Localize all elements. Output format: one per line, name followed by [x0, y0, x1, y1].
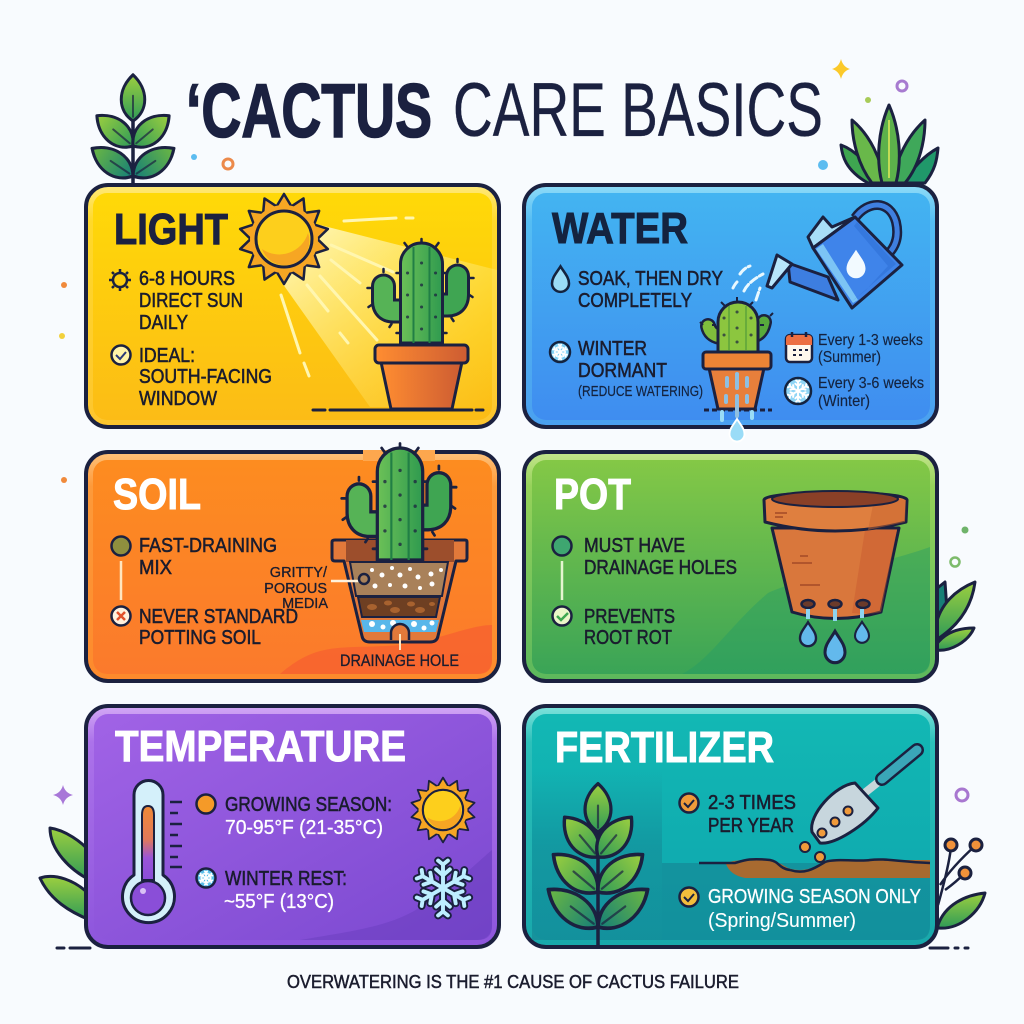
text: soak then dry: SOAK, THEN DRY	[578, 268, 723, 290]
panel background: fertilizer	[524, 706, 937, 947]
icon: calendar	[786, 332, 812, 362]
text: fast draining	[112, 535, 277, 579]
decoration: top left sprig	[85, 75, 181, 186]
title: CARE BASICS	[453, 68, 823, 153]
icon: sun	[238, 194, 330, 284]
heading: light: LIGHT	[114, 205, 228, 254]
text: prevents root rot: PREVENTS	[584, 606, 675, 628]
text: frequency	[680, 792, 796, 837]
text: ideal window	[112, 345, 272, 410]
callout: gritty porous media	[264, 565, 369, 612]
text: ideal window: SOUTH-FACING	[139, 366, 272, 388]
panel: light	[86, 185, 499, 427]
text: sun hours: 6-8 HOURS	[139, 268, 235, 290]
callout: gritty porous media: POROUS	[264, 581, 327, 597]
text: growing season only	[680, 886, 921, 932]
heading: pot: POT	[554, 470, 631, 519]
panel: fertilizer	[524, 706, 937, 948]
icon: sun	[410, 778, 476, 842]
icon: cactus in terracotta pot	[313, 239, 483, 410]
label: drainage hole: DRAINAGE HOLE	[340, 652, 459, 670]
icon: check	[680, 794, 698, 812]
icon: leafy plant	[540, 784, 656, 948]
heading: temperature: TEMPERATURE	[115, 722, 406, 771]
icon: blue badge	[196, 868, 216, 888]
text: must have drainage holes: MUST HAVE	[584, 535, 685, 557]
icon: trowel with fertilizer	[800, 750, 917, 862]
sun beam	[280, 225, 497, 407]
text: prevents root rot: ROOT ROT	[584, 627, 672, 649]
text: winter rest: WINTER REST:	[225, 868, 347, 890]
decoration: leaves right of pot panel	[935, 582, 975, 650]
decoration: berries and leaf right of fertilizer panel	[938, 839, 985, 928]
icon: cactus in soil cross section	[332, 444, 467, 650]
text: growing season: 70-95°F (21-35°C)	[225, 817, 383, 839]
text: winter dormant: (REDUCE WATERING)	[578, 384, 703, 400]
text: winter dormant: WINTER	[578, 338, 647, 360]
decoration: top right agave	[841, 105, 938, 183]
text: never standard: NEVER STANDARD	[139, 606, 298, 628]
decoration: dots and sparkles	[53, 59, 968, 948]
icon: soil badge	[112, 536, 130, 556]
text: winter schedule	[785, 375, 924, 410]
icon: snow badge	[550, 342, 570, 362]
sun rays	[281, 218, 413, 376]
text: soak then dry: COMPLETELY	[578, 290, 692, 312]
title: ‘CACTUS	[186, 69, 432, 154]
icon: small sun	[109, 269, 131, 291]
text: ideal window: WINDOW	[139, 388, 217, 410]
text: winter rest: ~55°F (13°C)	[224, 891, 334, 913]
title	[186, 68, 823, 154]
text: winter schedule: (Winter)	[818, 393, 870, 410]
soil mound	[726, 859, 930, 878]
panel background: light	[86, 185, 499, 427]
text: sun hours: DAILY	[139, 312, 188, 334]
icon: badge	[552, 536, 572, 556]
icon: thermometer	[122, 780, 182, 923]
text: growing season only: GROWING SEASON ONLY	[708, 886, 921, 908]
decoration: leaves left of temperature panel	[40, 828, 90, 920]
text: never standard	[112, 606, 298, 649]
text: must have drainage holes	[552, 535, 737, 579]
text: sun hours	[109, 268, 243, 334]
text: winter dormant: DORMANT	[578, 360, 667, 382]
icon: droplet	[552, 266, 569, 292]
callout: gritty porous media: MEDIA	[282, 596, 328, 612]
icon: watering can	[767, 205, 902, 308]
text: growing season: GROWING SEASON:	[225, 794, 392, 816]
heading: soil: SOIL	[113, 470, 201, 519]
icon: check	[680, 888, 698, 906]
text: soak then dry	[552, 266, 723, 312]
text: growing season only: (Spring/Summer)	[708, 910, 856, 932]
text: winter schedule: Every 3-6 weeks	[818, 375, 924, 392]
text: ideal window: IDEAL:	[139, 345, 195, 367]
panel: soil	[86, 444, 499, 681]
heading: water: WATER	[552, 204, 688, 253]
icon: terracotta pot with drainage holes	[764, 491, 907, 663]
text: frequency: 2-3 TIMES	[708, 792, 796, 814]
icon: x badge	[112, 606, 130, 626]
panel background: temperature	[86, 706, 499, 947]
panel background: soil	[86, 450, 499, 681]
text: winter dormant	[550, 338, 703, 400]
text: fast draining: FAST-DRAINING	[139, 535, 277, 557]
text: fast draining: MIX	[139, 557, 172, 579]
icon: orange badge	[196, 794, 216, 814]
icon: check	[112, 346, 130, 364]
callout: gritty porous media: GRITTY/	[270, 565, 328, 581]
text: summer schedule: Every 1-3 weeks	[818, 332, 923, 349]
text: winter rest	[196, 868, 347, 913]
panel background: water	[524, 185, 937, 427]
text: frequency: PER YEAR	[708, 815, 794, 837]
panel: water	[524, 185, 937, 442]
footer note: OVERWATERING IS THE #1 CAUSE OF CACTUS FAILURE	[287, 972, 739, 992]
panel: pot	[524, 452, 937, 681]
panel: temperature	[86, 706, 499, 947]
text: summer schedule	[786, 332, 923, 366]
text: growing season	[196, 794, 392, 839]
text: never standard: POTTING SOIL	[139, 627, 261, 649]
water spray	[733, 266, 763, 300]
icon: check	[552, 606, 572, 626]
icon: snowflake	[416, 861, 470, 915]
icon: small cactus in pot with drainage	[700, 297, 773, 442]
text: sun hours: DIRECT SUN	[139, 290, 243, 312]
text: prevents root rot	[552, 606, 675, 649]
icon: snow circle	[785, 378, 811, 404]
text: summer schedule: (Summer)	[818, 349, 881, 366]
panel background: pot	[524, 452, 937, 681]
heading: fertilizer: FERTILIZER	[555, 723, 774, 772]
text: must have drainage holes: DRAINAGE HOLES	[584, 557, 737, 579]
